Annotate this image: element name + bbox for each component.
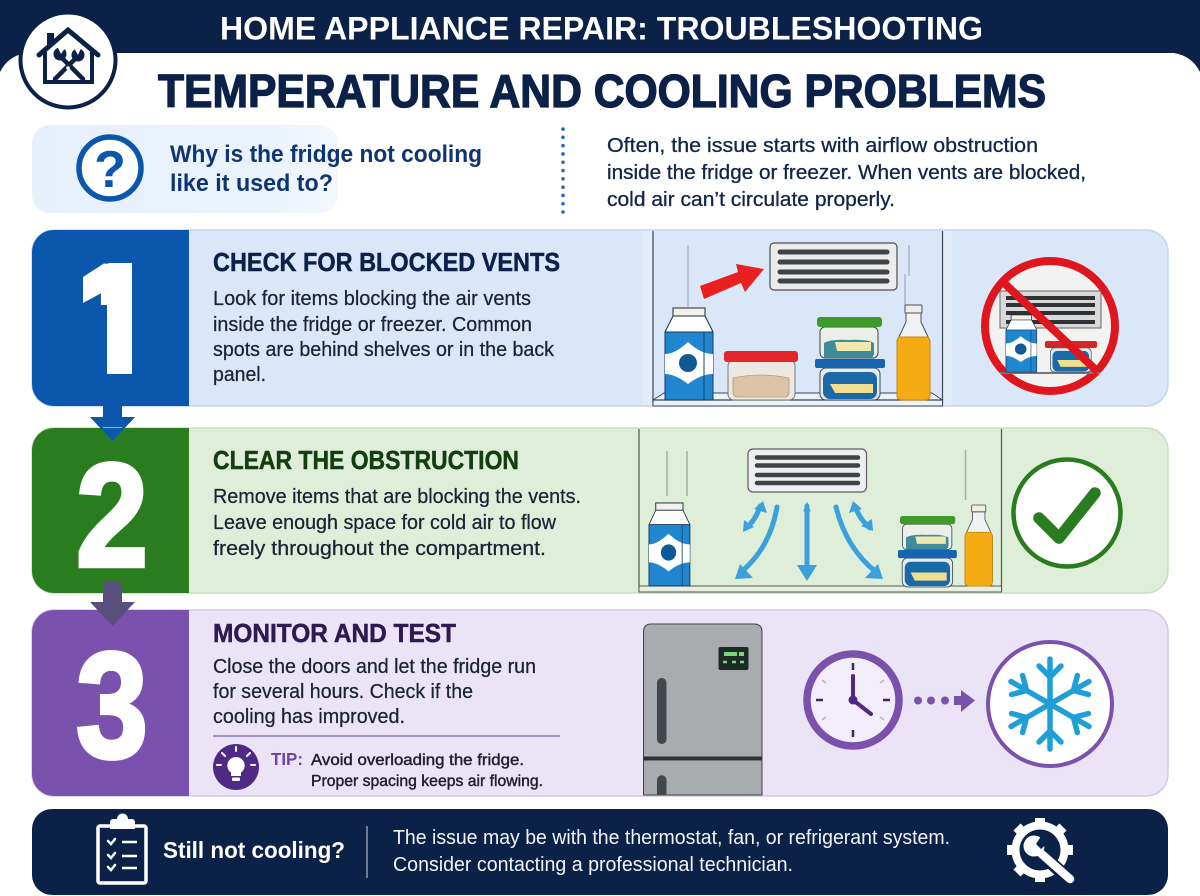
icon: snowflake bbox=[988, 642, 1112, 766]
icon: no blocking sign bbox=[985, 261, 1115, 391]
step 1 heading: CHECK FOR BLOCKED VENTS bbox=[213, 247, 560, 277]
illustration: clear airflow bbox=[639, 429, 1002, 592]
step number 1: 1 bbox=[67, 232, 153, 406]
stacked containers bbox=[898, 516, 957, 587]
step 1 text: panel. bbox=[213, 364, 266, 386]
tip text bbox=[311, 752, 543, 790]
intro text bbox=[607, 134, 1086, 211]
milk carton bbox=[665, 308, 713, 400]
icon: house with tools badge bbox=[20, 12, 116, 108]
red arrow bbox=[700, 264, 764, 299]
vent bbox=[748, 449, 866, 492]
blue lid container bbox=[815, 359, 885, 400]
footer text: The issue may be with the thermostat, fan, or refrigerant system. bbox=[393, 827, 950, 849]
icon: question mark bbox=[79, 137, 141, 199]
milk carton bbox=[649, 503, 690, 586]
step 2 heading: CLEAR THE OBSTRUCTION bbox=[213, 445, 519, 475]
step 3 text: for several hours. Check if the bbox=[213, 681, 473, 703]
panel: step 3 bbox=[32, 610, 1168, 796]
header title: HOME APPLIANCE REPAIR: TROUBLESHOOTING bbox=[220, 10, 983, 46]
question text: Why is the fridge not cooling bbox=[170, 141, 482, 168]
illustration: fridge shelf with blocked vent bbox=[643, 231, 952, 406]
tip text: Proper spacing keeps air flowing. bbox=[311, 773, 543, 790]
step 1 text bbox=[213, 288, 555, 386]
juice bottle bbox=[965, 505, 992, 586]
tip text: Avoid overloading the fridge. bbox=[311, 752, 524, 769]
question box bbox=[32, 125, 482, 213]
step 3 text bbox=[213, 656, 536, 728]
footer text: Consider contacting a professional technician. bbox=[393, 854, 793, 876]
icon: clipboard bbox=[98, 814, 146, 883]
juice bottle bbox=[897, 305, 930, 400]
step 3 text: cooling has improved. bbox=[213, 706, 405, 728]
panel: step 2 bbox=[32, 417, 1168, 598]
arrow: step 1 to 2 bbox=[90, 395, 135, 441]
illustration: fridge bbox=[644, 624, 762, 795]
icon: gear and wrench bbox=[1007, 818, 1073, 882]
display bbox=[718, 647, 748, 670]
intro text: Often, the issue starts with airflow obstruction bbox=[607, 134, 1038, 157]
red lid container bbox=[724, 351, 798, 400]
question text bbox=[170, 141, 482, 197]
main title: TEMPERATURE AND COOLING PROBLEMS bbox=[158, 65, 1046, 117]
step 3 heading: MONITOR AND TEST bbox=[213, 618, 456, 648]
step 3 text: Close the doors and let the fridge run bbox=[213, 656, 536, 678]
green lid container bbox=[817, 317, 882, 358]
tip bbox=[213, 744, 543, 790]
icon: question mark: ? bbox=[94, 141, 126, 199]
tip label: TIP: bbox=[271, 749, 303, 769]
step 1 text: inside the fridge or freezer. Common bbox=[213, 314, 532, 336]
arrow tip overlay bbox=[90, 417, 135, 441]
step 2 text: freely throughout the compartment. bbox=[213, 538, 546, 560]
icon: clock bbox=[807, 654, 899, 746]
step 2 text: Leave enough space for cold air to flow bbox=[213, 512, 557, 534]
step number 3: 3 bbox=[76, 621, 148, 789]
vent bbox=[770, 243, 897, 290]
arrow: dotted progress bbox=[914, 690, 975, 712]
airflow arrows bbox=[735, 501, 883, 581]
footer heading: Still not cooling? bbox=[163, 837, 345, 863]
footer bar bbox=[32, 809, 1168, 895]
step 1 text: spots are behind shelves or in the back bbox=[213, 339, 555, 361]
footer text bbox=[393, 827, 950, 876]
question text: like it used to? bbox=[170, 170, 333, 197]
step 1 text: Look for items blocking the air vents bbox=[213, 288, 531, 310]
intro text: inside the fridge or freezer. When vents are blocked, bbox=[607, 161, 1086, 184]
intro text: cold air can’t circulate properly. bbox=[607, 188, 895, 211]
icon: green check bbox=[1014, 460, 1120, 566]
step number 2: 2 bbox=[76, 434, 148, 598]
icon: light bulb bbox=[213, 744, 259, 790]
step 2 text bbox=[213, 486, 581, 560]
step 2 text: Remove items that are blocking the vents. bbox=[213, 486, 581, 508]
panel: step 1 bbox=[32, 230, 1168, 406]
arrow: step 2 to 3 bbox=[90, 581, 135, 626]
